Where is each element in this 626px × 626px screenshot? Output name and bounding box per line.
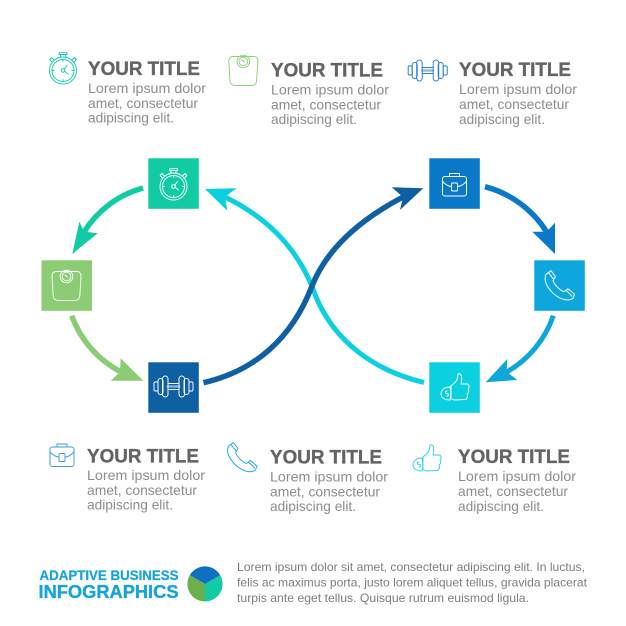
arrow: light blue, phone to thumb [486, 316, 553, 382]
icon: phone [228, 442, 257, 472]
icon: phone white [545, 271, 574, 300]
icon: dumbbell white [154, 376, 193, 397]
description 3: Lorem ipsum dolor [459, 81, 577, 97]
description 4: adipiscing elit. [87, 496, 173, 512]
description 6: adipiscing elit. [458, 498, 544, 514]
footer title: ADAPTIVE BUSINESS [40, 567, 178, 583]
description 3: adipiscing elit. [459, 111, 545, 127]
heading: your title 4: YOUR TITLE [87, 446, 199, 468]
icon: scale white [52, 270, 81, 300]
description 5: Lorem ipsum dolor [270, 468, 388, 484]
description 2: Lorem ipsum dolor [271, 82, 389, 98]
footer title [38, 567, 178, 602]
arrow: green, scale to dumbbell [72, 316, 143, 381]
description 2: amet, consectetur [271, 96, 381, 112]
description 1: Lorem ipsum dolor [88, 80, 206, 96]
icon: dumbbell [408, 60, 447, 81]
arrow: dark blue, dumbbell to briefcase [204, 187, 423, 383]
footer description: felis ac maximus porta, justo lorem aliquet tellus, gravida placerat [237, 576, 588, 590]
footer description: Lorem ipsum dolor sit amet, consectetur adipiscing elit. In luctus, [237, 560, 585, 574]
node: phone [534, 260, 585, 311]
description 2: adipiscing elit. [271, 111, 357, 127]
description 4: amet, consectetur [87, 482, 197, 498]
arrow: teal, stopwatch to scale [72, 188, 143, 254]
icon: stopwatch [50, 53, 76, 84]
description 6: Lorem ipsum dolor [458, 468, 576, 484]
arrow: blue, briefcase to phone [485, 187, 555, 254]
icon: briefcase white [442, 174, 466, 196]
description 5: adipiscing elit. [270, 498, 356, 514]
description 4: Lorem ipsum dolor [87, 467, 205, 483]
footer title: INFOGRAPHICS [38, 581, 178, 602]
text block: scale [229, 55, 389, 127]
text block: phone [228, 442, 388, 514]
text block: thumbs up [413, 445, 576, 514]
heading: your title 1: YOUR TITLE [88, 58, 200, 80]
node: thumbs up [429, 362, 480, 413]
footer description: turpis ante eget tellus. Quisque rutrum euismod ligula. [237, 591, 529, 605]
footer pie icon [187, 566, 223, 602]
description 3: amet, consectetur [459, 96, 569, 112]
icon: thumbs up [413, 445, 441, 471]
icon: stopwatch white [160, 169, 187, 200]
node: briefcase [429, 158, 480, 209]
description 1: amet, consectetur [88, 95, 198, 111]
text block: stopwatch [50, 53, 206, 126]
description 5: amet, consectetur [270, 484, 380, 500]
text block: dumbbell [408, 59, 577, 127]
node: scale [42, 260, 92, 311]
node: dumbbell [148, 362, 199, 413]
arrow: cyan, thumb to stopwatch [205, 188, 424, 382]
icon: weighing scale [229, 55, 258, 86]
heading: your title 5: YOUR TITLE [270, 446, 382, 468]
icon: thumbs up white [441, 374, 469, 400]
node: stopwatch [148, 158, 199, 209]
description 1: adipiscing elit. [88, 110, 174, 126]
heading: your title 3: YOUR TITLE [459, 59, 571, 81]
description 6: amet, consectetur [458, 483, 568, 499]
text block: briefcase [50, 444, 205, 512]
heading: your title 6: YOUR TITLE [458, 446, 570, 468]
icon: briefcase [50, 444, 74, 466]
heading: your title 2: YOUR TITLE [271, 60, 383, 82]
